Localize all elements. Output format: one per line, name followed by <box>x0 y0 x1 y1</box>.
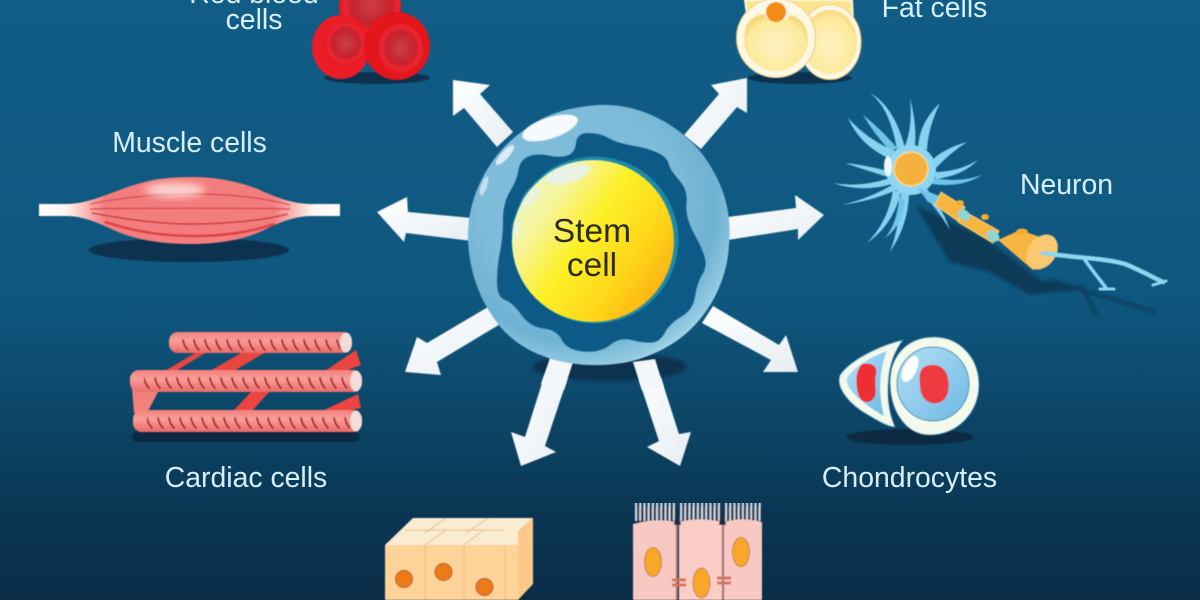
chondrocytes shadow <box>846 429 974 445</box>
bottom fibre <box>133 410 362 432</box>
cuboidal epithelial cells <box>385 518 533 600</box>
neuron soma <box>894 152 928 186</box>
columnar cell 1 <box>633 520 676 600</box>
arrow: to neuron <box>728 195 824 240</box>
cuboid front face <box>385 545 518 600</box>
redraw of lower arrow shafts over shadow <box>541 358 664 390</box>
arrow: to red blood cells <box>453 80 513 147</box>
red blood cells shadow <box>324 72 430 84</box>
arrow: to muscle cells <box>377 197 472 242</box>
neuron shadow <box>915 205 1155 315</box>
arrow: to fat cells <box>684 78 747 149</box>
chondrocytes <box>822 337 997 494</box>
chondrocyte illustration <box>839 337 979 435</box>
red blood cells <box>189 0 430 84</box>
label: red blood cells: cells <box>226 4 282 36</box>
stem cell <box>468 105 730 390</box>
columnar cell 3 <box>724 520 762 600</box>
cuboid cell dividers <box>405 518 505 600</box>
cuboid nuclei <box>396 564 493 596</box>
cell membrane <box>468 105 730 365</box>
cardiac fibres illustration <box>130 332 362 432</box>
right cell <box>890 337 979 435</box>
label: muscle cells: Muscle cells <box>112 127 267 159</box>
cuboid top face <box>385 518 533 545</box>
arrow: to columnar cells <box>633 359 691 466</box>
neuron <box>833 93 1166 315</box>
cardiac cells <box>130 332 362 494</box>
microvilli <box>635 511 761 514</box>
label: stem cell: cell <box>567 247 617 284</box>
middle fibre <box>130 370 362 392</box>
membrane highlights <box>478 109 581 196</box>
top fibre <box>169 332 352 353</box>
nucleus highlights <box>514 160 592 239</box>
fat cells shadow <box>748 72 852 84</box>
muscle cells <box>39 127 340 262</box>
arrow: to epithelial cuboid cells <box>511 358 573 466</box>
cuboid side face <box>518 518 533 600</box>
arrow: to chondrocytes <box>702 306 798 372</box>
arrows from stem cell <box>377 78 824 466</box>
neuron dendrites <box>833 93 982 252</box>
cytoplasm <box>497 133 706 352</box>
columnar cell 2 <box>679 520 722 600</box>
fat cell illustration <box>736 0 861 80</box>
label: stem cell: Stem <box>553 213 631 250</box>
nucleus <box>512 156 678 324</box>
cardiac shadow <box>132 432 360 442</box>
left cell <box>839 340 903 427</box>
columnar epithelial cells <box>633 508 762 600</box>
fat cells <box>736 0 987 84</box>
neuron terminal branches <box>1043 253 1166 289</box>
red blood cell illustration <box>312 0 430 80</box>
label: neuron: Neuron <box>1020 169 1113 201</box>
neuron axon <box>935 192 1064 276</box>
columnar nuclei <box>644 538 750 598</box>
arrow: to cardiac cells <box>405 307 502 375</box>
label: cardiac cells: Cardiac cells <box>165 462 327 494</box>
cell junction marks <box>677 523 723 600</box>
stem cell shadow <box>533 353 687 381</box>
label: chondrocytes: Chondrocytes <box>822 462 997 494</box>
fibre connectors <box>132 350 361 413</box>
muscle illustration <box>39 177 340 244</box>
muscle shadow <box>89 238 289 262</box>
